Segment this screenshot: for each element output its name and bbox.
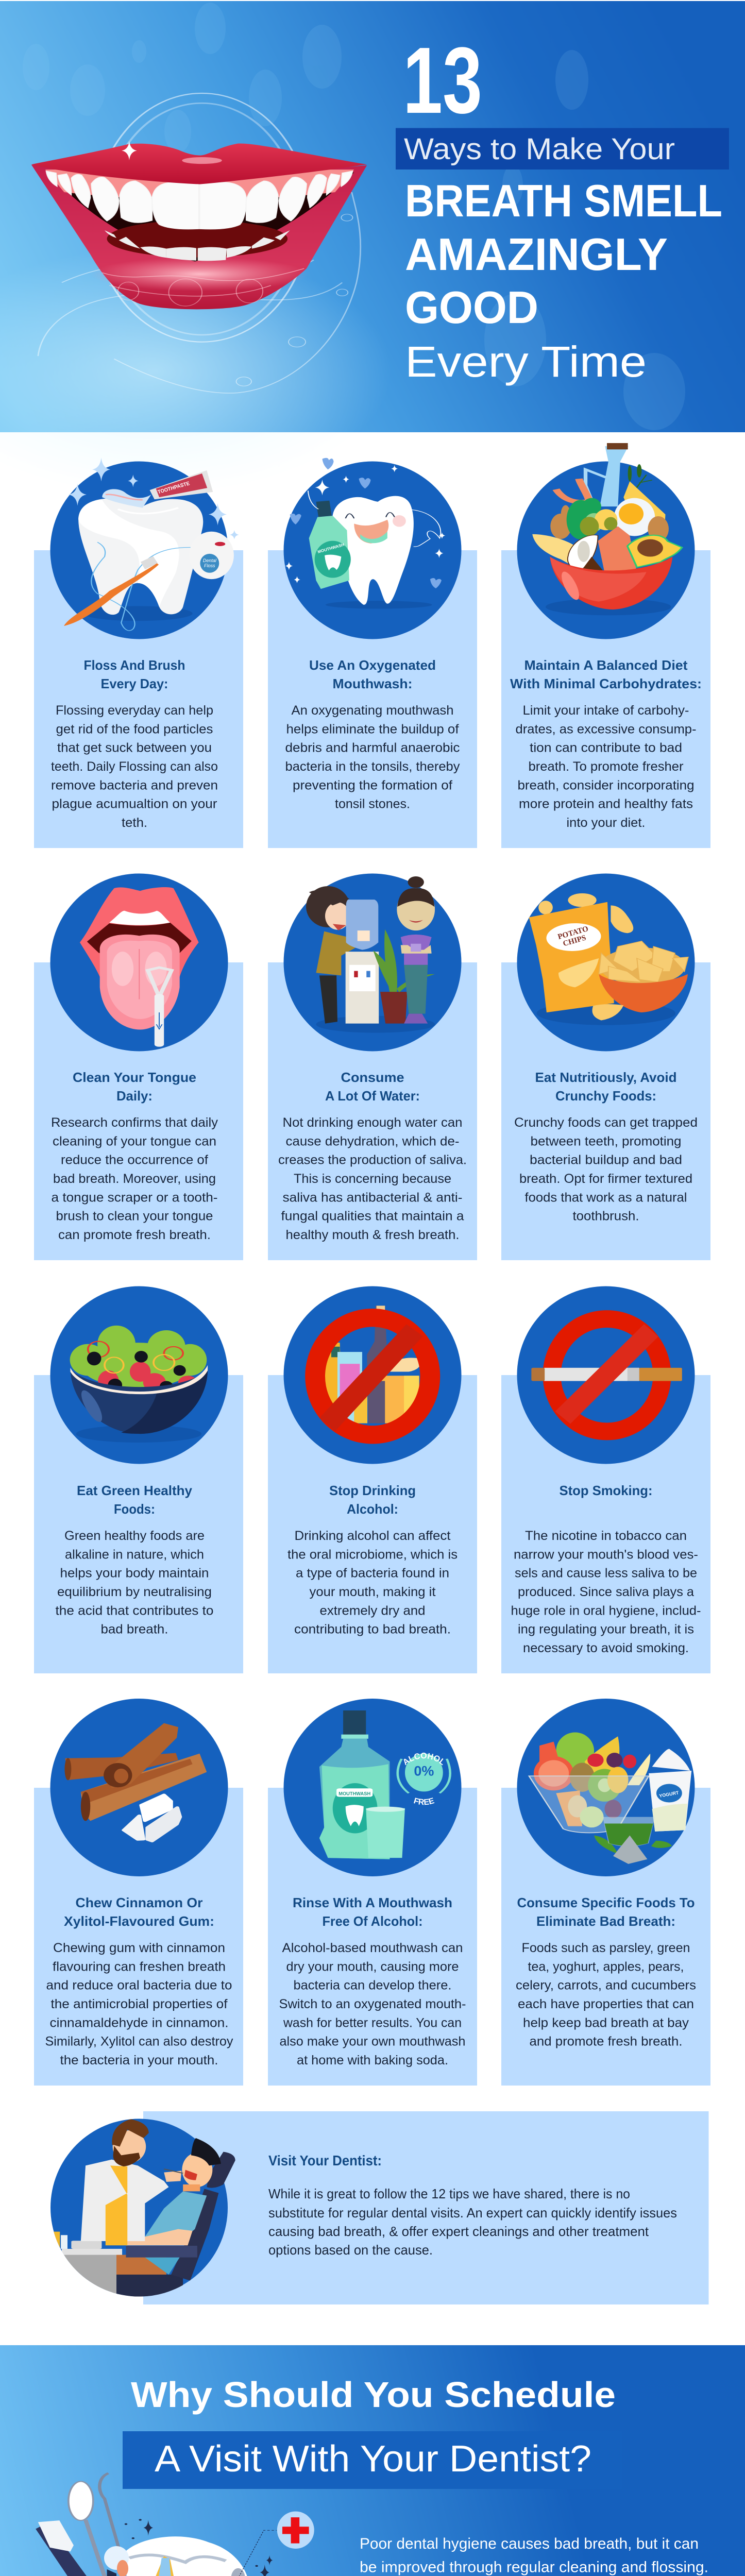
- badge: alcohol free: [396, 1753, 451, 1805]
- heading: Consume Specific Foods To: [517, 1895, 695, 1910]
- icon: tooth, toothpaste, floss and toothbrush: Dental: [203, 558, 217, 563]
- body text: teth.: [122, 816, 147, 830]
- body text: contributing to bad breath.: [294, 1622, 451, 1637]
- hero panel: [0, 1, 745, 495]
- card: oxygenated mouthwash: [268, 458, 477, 848]
- body text: dry your mouth, causing more: [286, 1959, 459, 1974]
- flying chips: [538, 893, 633, 933]
- icon: mouthwash bottle and glass: MOUTHWASH: [338, 1791, 370, 1797]
- body text: bacterial buildup and bad: [530, 1153, 682, 1167]
- body text: debris and harmful anaerobic: [285, 741, 460, 755]
- icon: cinnamon sticks and gum: [64, 1723, 207, 1841]
- body text: [287, 1529, 458, 1637]
- body text: reduce the occurrence of: [61, 1153, 208, 1167]
- body text: extremely dry and: [319, 1603, 426, 1618]
- heading: Clean Your Tongue: [73, 1070, 196, 1085]
- body text: [511, 1529, 701, 1655]
- body text: more protein and healthy fats: [519, 797, 693, 811]
- body text: get rid of the food particles: [56, 722, 213, 736]
- heading: With Minimal Carbohydrates:: [510, 676, 702, 691]
- icon: potato chips bag and bowl: [529, 893, 688, 1025]
- body text: Drinking alcohol can affect: [295, 1529, 451, 1543]
- icon: food bowl: [532, 443, 682, 615]
- ribbon text: A Visit With Your Dentist?: [155, 2438, 591, 2480]
- body text: necessary to avoid smoking.: [523, 1641, 689, 1655]
- body text: can promote fresh breath.: [58, 1228, 211, 1242]
- ribbon: [396, 128, 729, 170]
- icon: tooth, toothpaste, floss and toothbrush: TOOTHPASTE: [157, 481, 191, 495]
- body text: bad breath.: [101, 1622, 168, 1637]
- body text: [45, 1941, 233, 2067]
- body text: Similarly, Xylitol can also destroy: [45, 2035, 233, 2049]
- bowl: [71, 1369, 208, 1434]
- freshness swirl rings: [38, 93, 361, 393]
- body text: ing regulating your breath, it is: [518, 1622, 694, 1637]
- fruits: [534, 1733, 650, 1827]
- ribbon text: Ways to Make Your: [404, 132, 675, 166]
- body text: Switch to an oxygenated mouth-: [279, 1997, 466, 2011]
- drinks: [323, 1306, 421, 1423]
- heading: Maintain A Balanced Diet: [524, 657, 688, 673]
- body text: Foods such as parsley, green: [521, 1941, 690, 1955]
- heading: [293, 1895, 452, 1929]
- body text: [360, 2535, 708, 2576]
- body text: Not drinking enough water can: [282, 1115, 463, 1130]
- card: stop drinking alcohol: [268, 1286, 477, 1673]
- icon: smiling mouth: [31, 93, 367, 393]
- upper teeth: [46, 171, 352, 229]
- body text: creases the production of saliva.: [278, 1153, 467, 1167]
- heading: Mouthwash:: [333, 676, 412, 691]
- card: visit your dentist: [47, 2111, 709, 2304]
- heading: [517, 1895, 695, 1929]
- body text: Limit your intake of carbohy-: [522, 703, 689, 718]
- body text: the acid that contributes to: [56, 1603, 213, 1618]
- title: Why Should You Schedule: [131, 2375, 616, 2415]
- hero bokeh lights: [23, 3, 685, 430]
- body text: [515, 703, 697, 830]
- body text: and reduce oral bacteria due to: [46, 1978, 232, 1993]
- body text: and promote fresh breath.: [530, 2035, 682, 2049]
- body text: substitute for regular dental visits. An expert can quickly identify issues: [268, 2205, 677, 2221]
- heading: [83, 657, 185, 691]
- glass: [366, 1808, 405, 1858]
- icon: salad bowl: [70, 1326, 208, 1443]
- card: floss and brush: [34, 457, 243, 848]
- body text: [51, 703, 218, 830]
- heading: Stop Smoking:: [560, 1483, 652, 1498]
- body text: also make your own mouthwash: [279, 2035, 466, 2049]
- icon: fruit bowl, yogurt and green tea: [529, 1733, 691, 1864]
- heading: Eliminate Bad Breath:: [536, 1913, 675, 1929]
- body text: [51, 1115, 218, 1242]
- body text: produced. Since saliva plays a: [518, 1585, 694, 1599]
- body text: [268, 2186, 677, 2258]
- body text: brush to clean your tongue: [56, 1209, 213, 1224]
- gum pieces: [124, 1795, 180, 1841]
- body text: While it is great to follow the 12 tips we have shared, there is no: [268, 2186, 630, 2201]
- card: cinnamon or xylitol gum: [34, 1699, 243, 2086]
- heading: [309, 657, 436, 691]
- body text: celery, carrots, and cucumbers: [516, 1978, 696, 1993]
- body text: at home with baking soda.: [297, 2053, 448, 2067]
- floss box: [189, 532, 234, 579]
- body text: healthy mouth & fresh breath.: [285, 1228, 460, 1242]
- body text: bacteria in the tonsils, thereby: [285, 759, 460, 774]
- body text: bad breath. Moreover, using: [53, 1172, 216, 1186]
- body text: [516, 1941, 696, 2049]
- body text: tion can contribute to bad: [530, 741, 682, 755]
- body text: the antimicrobial properties of: [50, 1997, 228, 2011]
- sparkles: [285, 465, 445, 583]
- tongue scraper: [148, 968, 172, 1047]
- prohibition ring: [543, 1310, 671, 1440]
- dentist: [81, 2160, 168, 2241]
- tools: [36, 2473, 119, 2576]
- icon: potato chips bag and bowl: CHIPS: [562, 934, 587, 948]
- body text: [279, 1941, 466, 2067]
- body text: saliva has antibacterial & anti-: [282, 1190, 463, 1205]
- toothbrush: [141, 556, 158, 569]
- mouthwash bottle: [316, 501, 332, 517]
- card: green healthy foods: [34, 1286, 243, 1673]
- person with glasses: [306, 886, 360, 1024]
- toothpaste tube: [150, 470, 213, 499]
- worker: [90, 2546, 175, 2576]
- sparkles: [69, 457, 239, 539]
- body text: narrow your mouth's blood ves-: [514, 1547, 698, 1562]
- icon: cleaner on a giant tooth with tools: [36, 2473, 314, 2576]
- body text: be improved through regular cleaning and flossing.: [360, 2558, 708, 2576]
- body text: plague acumualtion on your: [52, 797, 217, 811]
- body text: The nicotine in tobacco can: [525, 1529, 687, 1543]
- body text: helps eliminate the buildup of: [286, 722, 459, 736]
- body text: [278, 1115, 467, 1242]
- shrimp: [556, 479, 589, 502]
- icon: tooth, toothpaste, floss and toothbrush: [64, 457, 239, 631]
- body text: tonsil stones.: [335, 797, 410, 811]
- banana slice: [532, 534, 575, 565]
- card: clean your tongue: [34, 874, 243, 1260]
- giant tooth: [126, 2536, 250, 2576]
- body text: help keep bad breath at bay: [523, 2015, 689, 2030]
- heading: [73, 1070, 196, 1104]
- body text: between teeth, promoting: [531, 1134, 681, 1148]
- water cooler: [346, 900, 379, 1024]
- body text: [56, 1529, 213, 1637]
- heading: [64, 1895, 214, 1929]
- patient: [145, 2192, 207, 2237]
- card: consume water: [268, 874, 477, 1260]
- yogurt cup: [649, 1749, 691, 1832]
- icon: dentist and patient: [47, 2119, 235, 2297]
- plant: [373, 929, 435, 1024]
- body text: huge role in oral hygiene, includ-: [511, 1603, 701, 1618]
- body text: each have properties that can: [518, 1997, 694, 2011]
- body text: causing bad breath, & offer expert cleanings and other treatment: [268, 2224, 649, 2239]
- headline line 3: GOOD: [405, 282, 538, 333]
- glass bowl: [529, 1776, 649, 1833]
- arrow: scraping direction: [157, 1012, 162, 1029]
- icon: potato chips bag and bowl: POTATO: [557, 925, 589, 941]
- body text: a tongue scraper or a tooth-: [52, 1190, 217, 1205]
- yogurt cup: YOGURT: [659, 1790, 680, 1799]
- body text: options based on the cause.: [268, 2242, 433, 2258]
- heading: Floss And Brush: [83, 657, 185, 673]
- sparkles: [125, 2519, 273, 2576]
- card: alcohol-free mouthwash: [268, 1699, 477, 2086]
- lettuce: [70, 1326, 207, 1387]
- headline line 2: AMAZINGLY: [405, 229, 668, 280]
- green tea: [594, 1817, 672, 1864]
- cavities: [231, 2568, 245, 2576]
- heading: [510, 657, 702, 691]
- panel: why schedule a dentist visit: [0, 2345, 745, 2576]
- desk and supplies: [53, 2232, 60, 2249]
- body text: Poor dental hygiene causes bad breath, but it can: [360, 2535, 699, 2552]
- body text: Crunchy foods can get trapped: [514, 1115, 698, 1130]
- body text: toothbrush.: [573, 1209, 639, 1224]
- badge: alcohol free: FREE: [414, 1798, 435, 1805]
- body text: tea, yoghurt, apples, pears,: [528, 1959, 684, 1974]
- olives and oil: [595, 509, 617, 530]
- heading: [77, 1483, 193, 1517]
- body text: Research confirms that daily: [51, 1115, 218, 1130]
- heading: Crunchy Foods:: [555, 1088, 656, 1104]
- heading: Rinse With A Mouthwash: [293, 1895, 452, 1910]
- body text: Chewing gum with cinnamon: [53, 1941, 225, 1955]
- body text: An oxygenating mouthwash: [292, 703, 453, 718]
- icon: medical cross: [277, 2512, 314, 2549]
- heading: Chew Cinnamon Or: [75, 1895, 203, 1910]
- badge: alcohol free: 0%: [414, 1764, 434, 1779]
- salad toppings: [98, 1362, 197, 1392]
- body text: your mouth, making it: [309, 1585, 436, 1599]
- body text: equilibrium by neutralising: [57, 1585, 212, 1599]
- heading: Visit Your Dentist:: [268, 2153, 382, 2168]
- headline: [396, 27, 729, 386]
- body text: flavouring can freshen breath: [53, 1959, 226, 1974]
- body text: drates, as excessive consump-: [515, 722, 697, 736]
- icon: mouthwash bottle and glass: [319, 1710, 451, 1859]
- body text: breath, consider incorporating: [517, 778, 695, 792]
- body text: [285, 703, 460, 811]
- bowl with chips: [599, 941, 688, 1012]
- bowl contents: [598, 527, 637, 572]
- card: specific foods: [501, 1699, 710, 2086]
- ribbon: [123, 2431, 622, 2489]
- lower teeth: [105, 230, 290, 261]
- red bowl: [550, 557, 672, 609]
- dashed callout lines: [191, 2530, 277, 2576]
- body text: wash for better results. You can: [283, 2015, 462, 2030]
- headline line 4: Every Time: [405, 337, 647, 386]
- person with bun: [397, 876, 435, 1024]
- body text: the bacteria in your mouth.: [60, 2053, 218, 2067]
- body text: a type of bacteria found in: [296, 1566, 449, 1581]
- icon: no alcohol sign: [305, 1306, 440, 1444]
- cheese: [623, 481, 666, 532]
- icon: no smoking sign: [531, 1310, 682, 1440]
- icon: tongue and scraper: [80, 887, 199, 1047]
- body text: foods that work as a natural: [524, 1190, 687, 1205]
- heading: Xylitol-Flavoured Gum:: [64, 1913, 214, 1929]
- heading: [329, 1483, 416, 1517]
- heading: Use An Oxygenated: [309, 657, 436, 673]
- body text: sels and cause less saliva to be: [515, 1566, 697, 1581]
- heading: Foods:: [114, 1501, 155, 1517]
- oil bottle: [600, 446, 629, 506]
- body text: that get suck between you: [57, 741, 212, 755]
- almonds: [648, 516, 669, 541]
- broccoli: [567, 500, 595, 539]
- body text: into your diet.: [567, 816, 645, 830]
- cigarette: [531, 1368, 682, 1381]
- heading: Free Of Alcohol:: [323, 1913, 422, 1929]
- herb sprig: [629, 475, 652, 499]
- prohibition ring: [305, 1309, 440, 1444]
- icon: tooth, toothpaste, floss and toothbrush: Floss: [204, 563, 215, 568]
- heading: [325, 1070, 420, 1104]
- body text: bacteria can develop there.: [294, 1978, 451, 1993]
- body text: the oral microbiome, which is: [287, 1547, 458, 1562]
- egg: [614, 498, 655, 536]
- body text: teeth. Daily Flossing can also: [51, 759, 218, 774]
- chips bag: [529, 902, 614, 1012]
- heading: Eat Green Healthy: [77, 1483, 193, 1498]
- heading: Alcohol:: [347, 1501, 398, 1517]
- body text: Green healthy foods are: [64, 1529, 205, 1543]
- body text: breath. To promote fresher: [529, 759, 683, 774]
- heading: Every Day:: [101, 676, 168, 691]
- icon: tooth holding mouthwash: MOUTHWASH: [317, 543, 345, 554]
- card: stop smoking: [501, 1286, 710, 1673]
- number 13: 13: [403, 27, 482, 133]
- decorative hearts: [290, 458, 442, 588]
- heading: Daily:: [116, 1088, 153, 1104]
- body text: This is concerning because: [294, 1172, 451, 1186]
- body text: remove bacteria and preven: [51, 778, 218, 792]
- heading: Eat Nutritiously, Avoid: [535, 1070, 677, 1085]
- body text: breath. Opt for firmer textured: [519, 1172, 692, 1186]
- body text: cinnamaldehyde in cinnamon.: [49, 2015, 229, 2030]
- body text: [514, 1115, 698, 1224]
- badge: alcohol free: ALCOHOL: [404, 1753, 443, 1765]
- heading: Consume: [341, 1070, 404, 1085]
- icon: two people at water cooler: [306, 876, 435, 1033]
- dental chair: [207, 2152, 235, 2188]
- body text: fungal qualities that maintain a: [281, 1209, 464, 1224]
- heading: [535, 1070, 677, 1104]
- icon: tooth holding mouthwash: [285, 458, 445, 609]
- body text: Alcohol-based mouthwash can: [282, 1941, 463, 1955]
- heading: A Lot Of Water:: [325, 1088, 420, 1104]
- body text: alkaline in nature, which: [65, 1547, 204, 1562]
- body text: preventing the formation of: [293, 778, 452, 792]
- body text: cause dehydration, which de-: [285, 1134, 460, 1148]
- heading: Stop Drinking: [329, 1483, 416, 1498]
- body text: helps your body maintain: [60, 1566, 209, 1581]
- floss thread: [91, 542, 193, 631]
- card: balanced diet: [501, 443, 710, 848]
- body text: cleaning of your tongue can: [53, 1134, 216, 1148]
- card: crunchy foods: [501, 874, 710, 1260]
- body text: Flossing everyday can help: [56, 703, 213, 718]
